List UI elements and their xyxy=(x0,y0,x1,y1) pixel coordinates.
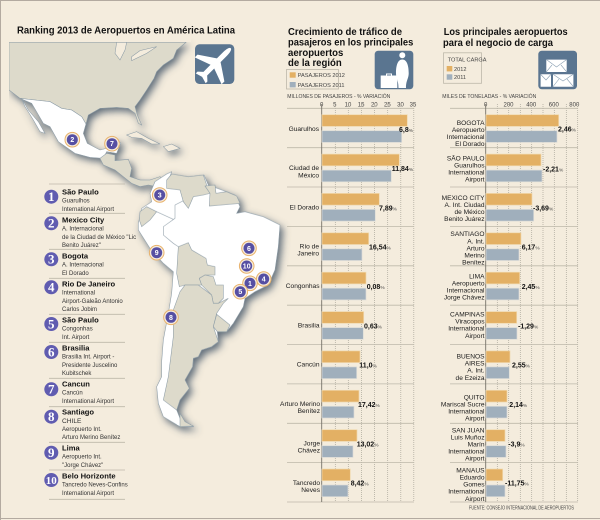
rank 4: Rio De Janeiro xyxy=(62,280,116,289)
row Lima: Internacional xyxy=(447,287,485,294)
row Buenos Aires: BUENOS xyxy=(457,353,485,360)
row Santiago: A. Int. xyxy=(467,238,485,245)
row San Juan: SAN JUAN xyxy=(452,427,485,434)
rank 7: Cancún xyxy=(62,390,83,396)
row Buenos Aires: A. Int. xyxy=(467,368,485,375)
row Buenos Aires: de Ezeiza xyxy=(456,375,485,382)
row Bogota xyxy=(447,115,577,148)
rank 8: CHILE xyxy=(62,418,82,425)
heading: cargo xyxy=(443,27,568,49)
row Jorge Chávez: 13,02% xyxy=(357,441,379,448)
map marker 4 xyxy=(256,272,271,286)
row Santiago: Merino xyxy=(464,252,485,259)
row Lima: Aeropuerto xyxy=(452,280,485,287)
legend: cargo xyxy=(444,53,487,83)
row San Juan xyxy=(448,427,525,463)
rank 3: El Dorado xyxy=(62,271,89,277)
map: South America xyxy=(138,172,280,427)
rank 4: 4 xyxy=(48,280,55,295)
heading: passenger traffic: pasajeros en los principales xyxy=(288,38,414,48)
map marker 9: 9 xyxy=(155,250,159,257)
row Jorge Chávez: Chávez xyxy=(298,448,320,455)
row Jorge Chávez xyxy=(298,430,379,457)
row Mexico City: de México xyxy=(454,209,485,216)
x axis labels: 200 xyxy=(503,102,514,108)
map marker 10: 10 xyxy=(243,264,251,270)
rank 7: International Airport xyxy=(62,399,114,405)
row Quito xyxy=(441,390,528,423)
map marker 2 xyxy=(65,132,80,147)
rank 4: Carlos Jobim xyxy=(62,307,97,313)
bar chart: passengers xyxy=(280,102,417,502)
x axis labels: 30 xyxy=(397,102,404,108)
x axis labels: 20 xyxy=(371,102,378,108)
row São Paulo: Guarulhos xyxy=(454,162,485,169)
row Arturo Merino Benítez: Benítez xyxy=(298,408,320,415)
rank 9 xyxy=(44,444,103,469)
row Campinas: Viracopos xyxy=(455,319,485,326)
map marker 3: 3 xyxy=(158,192,162,200)
row Mexico City: Benito Juárez xyxy=(444,216,484,223)
rank 8: Santiago xyxy=(62,408,94,417)
map marker 5: 5 xyxy=(238,289,242,296)
row Santiago: Benítez xyxy=(462,259,484,266)
row El Dorado: 7,89% xyxy=(379,205,398,212)
row El Dorado: El Dorado xyxy=(290,204,319,211)
row Cancún: 11,0% xyxy=(359,362,378,369)
legend: passengers: PASAJEROS 2012 xyxy=(298,73,345,79)
rank 10: Tancredo Neves-Confins xyxy=(62,482,128,488)
rank 6: Presidente Juscelino xyxy=(62,363,118,369)
row Campinas: International xyxy=(448,326,485,333)
map of the Americas xyxy=(1,1,280,427)
row Mexico City: MEXICO CITY xyxy=(442,195,485,202)
rank 2: Benito Juárez" xyxy=(62,243,101,249)
row Manaus: International xyxy=(448,489,485,496)
rank 8: 8 xyxy=(48,409,55,424)
row Quito: 2,14% xyxy=(509,402,528,409)
row São Paulo: International xyxy=(448,169,485,176)
row Ciudad de México: Ciudad de xyxy=(289,165,319,172)
row Tancredo Neves: Neves xyxy=(301,487,321,494)
rank 10 xyxy=(44,472,128,497)
rank 2 xyxy=(44,216,136,249)
row Santiago: 6,17% xyxy=(522,245,540,252)
rank 9: "Jorge Chávez" xyxy=(62,463,103,469)
map marker 10 xyxy=(239,259,254,273)
row Tancredo Neves: Tancredo xyxy=(293,480,320,487)
row Buenos Aires: AIRES xyxy=(465,361,485,368)
row Brasilia: Brasilia xyxy=(298,323,320,330)
row Quito: QUITO xyxy=(464,395,484,402)
ranking list xyxy=(44,184,136,499)
row Lima: LIMA xyxy=(469,273,485,280)
row Bogota: Internacional xyxy=(447,134,485,141)
row Campinas: Airport xyxy=(465,333,485,340)
rank 4 xyxy=(44,280,123,313)
map marker 9 xyxy=(149,245,164,260)
rank 2: 2 xyxy=(48,216,55,231)
rank 6 xyxy=(44,344,118,377)
x axis labels: 400 xyxy=(526,102,537,108)
rank 10: 10 xyxy=(46,475,57,487)
row Tancredo Neves xyxy=(293,469,369,497)
x axis labels xyxy=(484,102,580,108)
legend: passengers xyxy=(286,70,345,89)
rank 9: 9 xyxy=(48,445,55,460)
row San Juan: International xyxy=(448,449,485,456)
row Bogota: 2,46% xyxy=(558,126,577,133)
x axis labels xyxy=(320,102,417,108)
map marker 8: 8 xyxy=(169,315,173,322)
rank 7: 7 xyxy=(48,382,55,397)
map marker 6 xyxy=(242,241,256,256)
rank 6: Brasilia xyxy=(62,344,90,353)
row Manaus: -11,75% xyxy=(505,480,529,487)
x axis labels: 5 xyxy=(333,102,337,108)
row Tancredo Neves: 8,42% xyxy=(351,480,369,487)
row Bogota: Aeropuerto xyxy=(452,127,485,134)
legend: cargo: TOTAL CARGA xyxy=(448,57,487,63)
row Manaus: Airport xyxy=(465,496,485,503)
heading: cargo: Los principales aeropuertos xyxy=(444,27,568,38)
row Campinas: CAMPINAS xyxy=(450,312,485,319)
row Santiago: Arturo xyxy=(467,245,485,252)
row São Paulo: -2,21% xyxy=(543,166,564,173)
row Congonhas: 0,08% xyxy=(367,284,385,291)
rank 3: Bogota xyxy=(62,252,89,261)
rank 3: A. Internacional xyxy=(62,262,104,268)
row Mexico City xyxy=(442,193,554,223)
map marker 2: 2 xyxy=(70,137,74,144)
rank 9: Aeropuerto Int. xyxy=(62,454,102,460)
heading: passenger traffic xyxy=(288,27,414,69)
row Campinas: -1,29% xyxy=(518,323,539,330)
icon: passenger and suitcase xyxy=(375,51,413,89)
row San Juan: Marín xyxy=(468,442,485,449)
row Arturo Merino Benítez: Arturo Merino xyxy=(280,401,320,408)
row Manaus: Eduardo xyxy=(460,475,485,482)
map marker 1 xyxy=(243,276,257,291)
row San Juan: Luis Muñoz xyxy=(451,435,484,442)
rank 7 xyxy=(44,380,114,405)
heading: passenger traffic: aeropuertos xyxy=(288,48,344,59)
row Brasilia: 0,63% xyxy=(364,323,383,330)
rank 5: Int. Airport xyxy=(62,335,90,341)
rank 7: Cancun xyxy=(62,380,90,389)
title: ranking: Ranking 2013 de Aeropuertos en América Latina xyxy=(17,26,235,36)
icon: envelopes xyxy=(538,51,577,89)
row Congonhas: Congonhas xyxy=(286,283,320,290)
row Guarulhos: Guarulhos xyxy=(289,126,320,133)
rank 3 xyxy=(44,252,104,277)
rank 1: International Airport xyxy=(62,207,114,213)
rank 8: Arturo Merino Benítez xyxy=(62,435,120,441)
row San Juan: Airport xyxy=(465,456,485,463)
row Ciudad de México: México xyxy=(298,172,319,179)
row Río de Janeiro: 16,54% xyxy=(369,245,392,252)
rank 6: Brasilia Int. Airport - xyxy=(62,354,114,360)
rank 1: Guarulhos xyxy=(62,198,90,204)
row Manaus: Gomes xyxy=(463,482,485,489)
map marker 1: 1 xyxy=(248,281,252,288)
row Arturo Merino Benítez: 17,42% xyxy=(358,402,381,409)
rank 4: Airport-Galeão Antonio xyxy=(62,299,123,305)
rank 1: São Paulo xyxy=(62,188,99,197)
row Arturo Merino Benítez xyxy=(280,390,381,418)
map marker 6: 6 xyxy=(247,246,251,253)
x axis labels: 10 xyxy=(345,102,352,108)
rank 1 xyxy=(44,188,114,213)
row Lima: 2,45% xyxy=(522,284,540,291)
map marker 7: 7 xyxy=(110,141,114,148)
row Río de Janeiro: Janeiro xyxy=(297,251,319,258)
x axis labels: 35 xyxy=(410,102,417,108)
x axis labels: 0 xyxy=(484,102,488,108)
row Río de Janeiro xyxy=(297,233,392,260)
x axis labels: 15 xyxy=(358,102,365,108)
row São Paulo xyxy=(447,153,564,183)
row Quito: Airport xyxy=(465,416,485,423)
rank 10: International Airport xyxy=(62,491,114,497)
legend: cargo: 2012 xyxy=(454,67,466,73)
rank 5: São Paulo xyxy=(62,316,99,325)
chart caption: cargo: MILES DE TONELADAS - % VARIACIÓN xyxy=(442,93,536,100)
row Jorge Chávez: Jorge xyxy=(304,441,320,448)
row São Paulo: Airport xyxy=(465,176,485,183)
bar chart: cargo xyxy=(441,102,580,503)
rank 1: 1 xyxy=(48,189,55,204)
rank 3: 3 xyxy=(48,252,55,267)
rank 9: Lima xyxy=(62,444,81,453)
rank 6: Kubitschek xyxy=(62,371,92,377)
rank 8 xyxy=(44,408,120,441)
rank 2: A. Internacional xyxy=(62,226,104,232)
row Río de Janeiro: Río de xyxy=(300,243,319,250)
row Manaus: MANAUS xyxy=(456,468,485,475)
legend: cargo: 2011 xyxy=(454,75,466,81)
row Cancún xyxy=(297,351,378,379)
map marker 8 xyxy=(164,310,178,325)
row Guarulhos: 6,8% xyxy=(399,127,414,134)
map marker 4: 4 xyxy=(262,276,266,284)
rank 5 xyxy=(44,316,99,341)
row Quito: International xyxy=(448,409,485,416)
row São Paulo: SÃO PAULO xyxy=(447,153,484,162)
rank 5: 5 xyxy=(48,316,55,331)
row San Juan: -3,9% xyxy=(508,441,525,448)
row Santiago xyxy=(450,231,540,266)
map marker 7 xyxy=(105,136,119,151)
row Bogota: BOGOTA xyxy=(457,120,485,127)
rank 6: 6 xyxy=(48,344,55,359)
icon: airplane xyxy=(187,35,244,92)
rank 2: de la Ciudad de México "Lic xyxy=(62,235,136,241)
row Brasilia xyxy=(298,312,383,339)
rank 8: Aeropuerto Int. xyxy=(62,427,102,433)
rank 2: Mexico City xyxy=(62,216,105,225)
heading: passenger traffic: Crecimiento de tráfico de xyxy=(288,27,402,38)
row Mexico City: -3,69% xyxy=(533,205,554,212)
row Santiago: SANTIAGO xyxy=(450,231,484,238)
heading: passenger traffic: de la región xyxy=(288,58,342,69)
row Lima: Jorge Chávez xyxy=(444,294,484,301)
row Mexico City: A. Int. Ciudad xyxy=(445,202,485,209)
map: North America xyxy=(9,42,186,187)
row Buenos Aires xyxy=(456,351,531,382)
map marker 3 xyxy=(152,188,167,202)
row Ciudad de México: 11,84% xyxy=(392,166,414,173)
row Guarulhos xyxy=(289,115,414,142)
x axis labels: 25 xyxy=(384,102,391,108)
x axis labels: 0 xyxy=(320,102,324,108)
row Manaus xyxy=(448,468,529,503)
row El Dorado xyxy=(290,193,398,221)
legend: passengers: PASAJEROS 2011 xyxy=(298,83,344,89)
row Quito: Mariscal Sucre xyxy=(441,402,485,409)
chart caption: passengers: MILLONES DE PASAJEROS - % VARIACIÓN xyxy=(287,93,390,100)
row Congonhas xyxy=(286,272,385,300)
heading: cargo: para el negocio de carga xyxy=(443,38,553,49)
rank 10: Belo Horizonte xyxy=(62,472,116,481)
row Campinas xyxy=(448,312,539,340)
row Buenos Aires: 2,55% xyxy=(512,363,531,370)
rank 4: International xyxy=(62,290,95,296)
x axis labels: 800 xyxy=(569,102,580,108)
map marker 5 xyxy=(233,284,248,299)
row Bogota: El Dorado xyxy=(455,141,485,148)
row Ciudad de México xyxy=(289,154,414,182)
x axis labels: 600 xyxy=(549,102,559,108)
rank 5: Congonhas xyxy=(62,326,93,332)
row Lima xyxy=(444,272,540,301)
row Cancún: Cancún xyxy=(297,362,320,369)
